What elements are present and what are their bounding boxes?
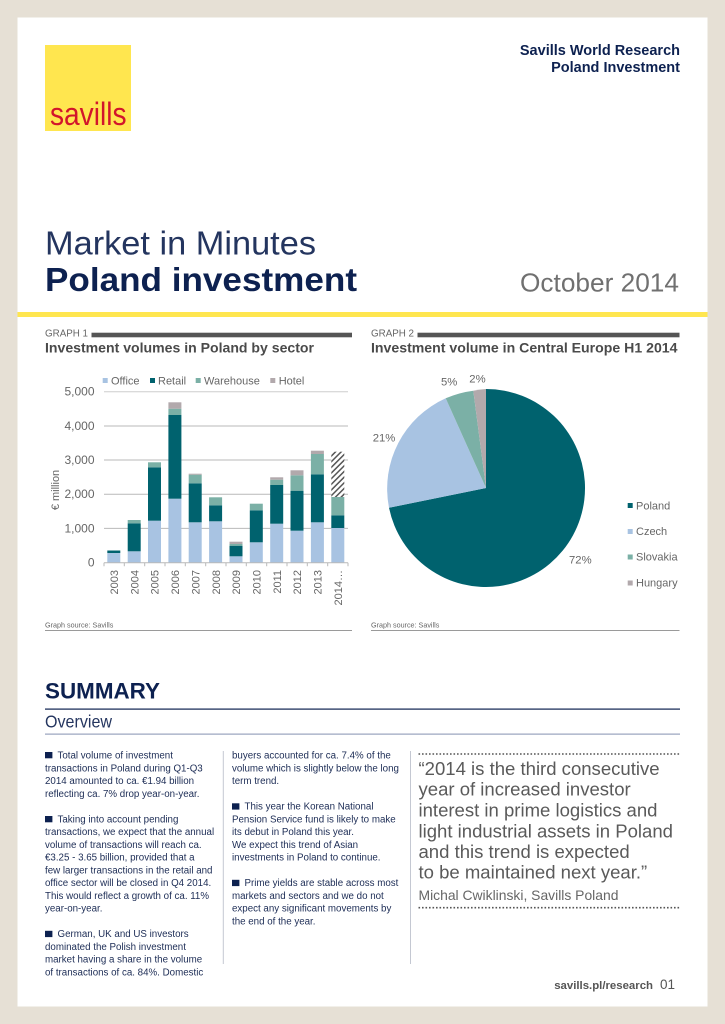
pie percentage labels: 21%: [373, 433, 395, 445]
x axis year labels: 2013: [313, 570, 325, 594]
text block: summary column 2: buyers accounted for ca. 7.4% of the: [232, 750, 391, 762]
pie legend: Slovakia: [636, 552, 678, 564]
footer: website and page number: 01: [660, 977, 675, 992]
y axis labels: 4,000: [64, 419, 95, 433]
chart legend: [103, 375, 304, 387]
text block: summary column 2: Pension Service fund is likely to make: [232, 814, 396, 825]
chart legend: Retail: [158, 375, 186, 387]
pie legend: Poland: [636, 500, 670, 512]
text block: summary column 1: year-on-year.: [45, 904, 102, 914]
x axis year labels: 2010: [252, 570, 264, 594]
x axis year labels: 2004: [129, 570, 141, 594]
text block: summary column 2: [232, 750, 399, 927]
text block: summary column 1: 2014 amounted to ca. €1.94 billion: [45, 776, 194, 787]
pie legend: [628, 500, 678, 590]
header: publication name: Savills World Research: [520, 43, 680, 59]
text block: summary column 1: office sector will be closed in Q4 2014.: [45, 878, 211, 889]
pie chart: central europe share: [387, 389, 585, 587]
graph 2 heading: [371, 329, 680, 356]
x axis year labels: [109, 570, 345, 605]
x axis year labels: 2006: [170, 570, 182, 594]
pull quote: light industrial assets in Poland: [418, 820, 673, 841]
date: October 2014: [520, 268, 679, 298]
header: publication name: Poland Investment: [551, 60, 680, 76]
x axis year labels: 2014…: [333, 570, 345, 605]
text block: summary column 1: transactions, we expect that the annual: [45, 827, 214, 838]
savills logo: [45, 45, 131, 132]
text block: summary column 2: investments in Poland to continue.: [232, 852, 381, 864]
x axis year labels: 2012: [292, 570, 304, 594]
panel: graph 1: [45, 329, 352, 631]
chart legend: Hotel: [279, 375, 304, 387]
pull quote: year of increased investor: [418, 779, 631, 800]
y axis labels: 1,000: [64, 521, 95, 535]
pie legend: Czech: [636, 526, 667, 538]
text block: summary column 1: reflecting ca. 7% drop year-on-year.: [45, 789, 199, 800]
y axis labels: 5,000: [64, 385, 95, 399]
overview subheading: Overview: [45, 711, 112, 731]
pie legend: Hungary: [636, 578, 678, 590]
x axis year labels: 2009: [231, 570, 243, 594]
column separator 1: [223, 751, 224, 964]
pull quote: interest in prime logistics and: [418, 799, 657, 820]
text block: summary column 2: This year the Korean National: [244, 802, 374, 812]
pull quote: [418, 754, 680, 908]
text block: summary column 1: volume of transactions will reach ca.: [45, 840, 202, 851]
graph 2 heading: GRAPH 2: [371, 329, 414, 340]
text block: summary column 1: Total volume of investment: [58, 750, 173, 762]
text block: summary column 2: volume which is slightly below the long: [232, 763, 399, 774]
summary heading: SUMMARY: [45, 678, 160, 703]
x axis year labels: 2005: [150, 570, 162, 594]
x axis year labels: 2003: [109, 570, 121, 594]
text block: summary column 1: dominated the Polish investment: [45, 942, 186, 953]
pie percentage labels: 5%: [441, 377, 457, 389]
graph 1 heading: [45, 329, 352, 356]
text block: summary column 2: the end of the year.: [232, 916, 315, 927]
text block: summary column 2: expect any significant movements by: [232, 904, 391, 914]
text block: summary column 2: We expect this trend of Asian: [232, 840, 358, 851]
pull quote: “2014 is the third consecutive: [418, 758, 660, 779]
pie percentage labels: 2%: [469, 373, 486, 385]
title: Poland investment: [45, 261, 357, 298]
column separator 2: [410, 751, 411, 964]
text block: summary column 1: This would reflect a growth of ca. 11%: [45, 891, 209, 902]
text block: summary column 1: [45, 750, 214, 978]
chart legend: Office: [111, 375, 140, 387]
title: [45, 224, 357, 298]
text block: summary column 1: transactions in Poland during Q1-Q3: [45, 763, 203, 774]
text block: summary column 1: Taking into account pending: [58, 814, 178, 825]
y axis labels: 0: [88, 556, 95, 570]
header: publication name: [520, 43, 680, 76]
graph 2 source: Graph source: Savills: [371, 620, 440, 629]
pull quote: to be maintained next year.”: [418, 861, 647, 882]
text block: summary column 1: €3.25 - 3.65 billion, provided that a: [45, 852, 195, 864]
pull quote: Michal Cwiklinski, Savills Poland: [418, 887, 618, 903]
footer: website and page number: [554, 977, 675, 992]
pie percentage labels: 72%: [569, 554, 592, 566]
text block: summary column 2: Prime yields are stable across most: [244, 878, 399, 889]
y axis title: € million: [50, 470, 62, 510]
graph 1 heading: Investment volumes in Poland by sector: [45, 340, 315, 356]
bar chart: investment by sector: [104, 392, 348, 566]
chart legend: Warehouse: [204, 375, 260, 387]
yellow divider band: [18, 312, 708, 317]
text block: summary column 1: of transactions of ca. 84%. Domestic: [45, 967, 203, 978]
text block: summary column 1: market having a share in the volume: [45, 954, 202, 966]
x axis year labels: 2007: [190, 570, 202, 594]
graph 2 heading: Investment volume in Central Europe H1 2014: [371, 340, 678, 356]
y axis labels: 2,000: [64, 487, 95, 501]
x axis year labels: 2008: [211, 570, 223, 594]
text block: summary column 2: term trend.: [232, 776, 279, 787]
y axis labels: 3,000: [64, 453, 95, 467]
savills logo: savills: [50, 96, 126, 132]
text block: summary column 2: markets and sectors and we do not: [232, 891, 384, 902]
pie percentage labels: [373, 373, 592, 566]
graph 1 heading: GRAPH 1: [45, 329, 88, 340]
text block: summary column 2: its debut in Poland this year.: [232, 827, 354, 838]
title: Market in Minutes: [45, 224, 316, 262]
text block: summary column 1: German, UK and US investors: [58, 929, 189, 940]
text block: summary column 1: few larger transactions in the retail and: [45, 865, 212, 876]
y axis labels: [64, 385, 95, 570]
graph 1 source: Graph source: Savills: [45, 620, 114, 629]
footer: website and page number: savills.pl/research: [554, 980, 653, 992]
x axis year labels: 2011: [272, 570, 284, 594]
panel: graph 2: [371, 329, 680, 631]
pull quote: and this trend is expected: [418, 841, 630, 862]
